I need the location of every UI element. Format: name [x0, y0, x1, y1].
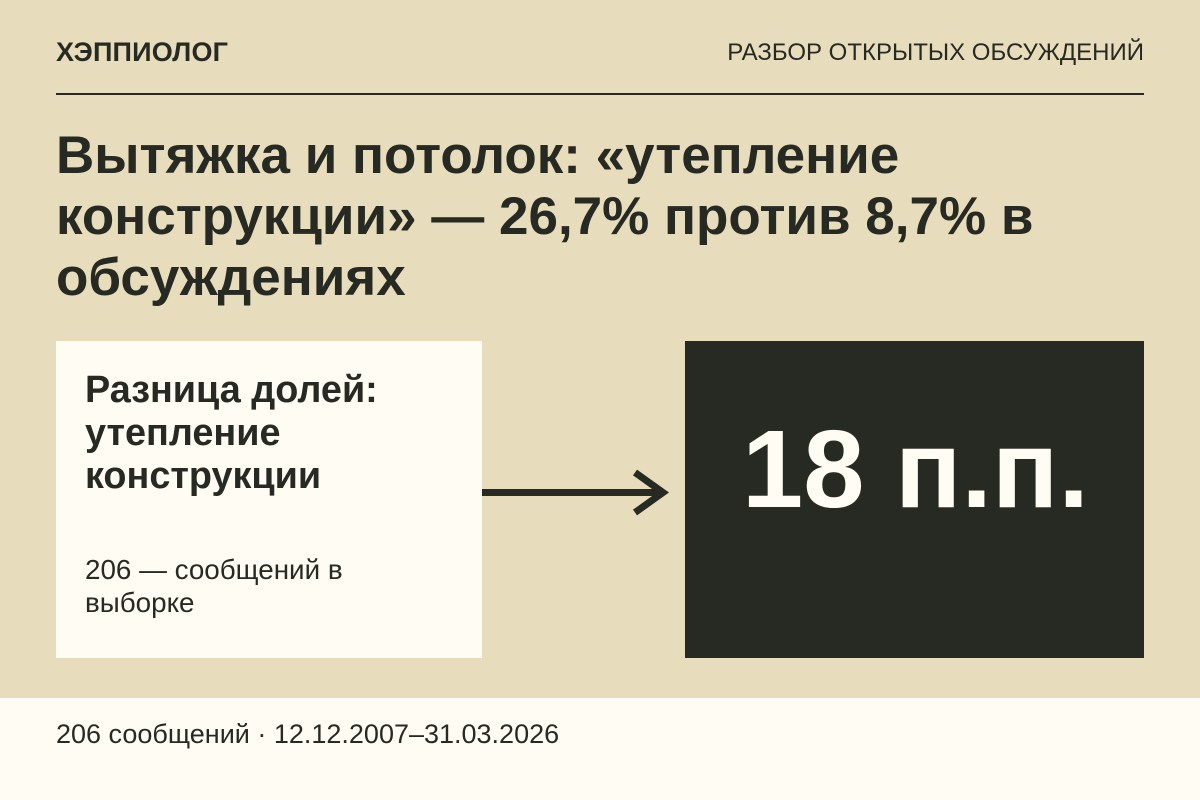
title: Вытяжка и потолок: «утепление: [56, 126, 899, 185]
sample size note: [85, 554, 343, 618]
panel heading: [85, 369, 378, 497]
title: [56, 126, 1033, 307]
panel heading: утепление: [85, 412, 280, 454]
header label: РАЗБОР ОТКРЫТЫХ ОБСУЖДЕНИЙ: [727, 39, 1144, 66]
panel heading: конструкции: [85, 455, 321, 497]
arrow: [482, 470, 669, 516]
result value: 18 п.п.: [742, 408, 1089, 531]
sample size note: 206 — сообщений в: [85, 554, 343, 585]
title: обсуждениях: [56, 248, 406, 307]
panel: description: [56, 341, 482, 658]
brand name: ХЭППИОЛОГ: [56, 37, 228, 67]
panel: result: [685, 341, 1144, 658]
footer bar: [0, 698, 1200, 800]
panel heading: Разница долей:: [85, 369, 378, 411]
title: конструкции» — 26,7% против 8,7% в: [56, 187, 1033, 246]
sample size note: выборке: [85, 587, 195, 618]
footer text: 206 сообщений · 12.12.2007–31.03.2026: [56, 719, 559, 749]
